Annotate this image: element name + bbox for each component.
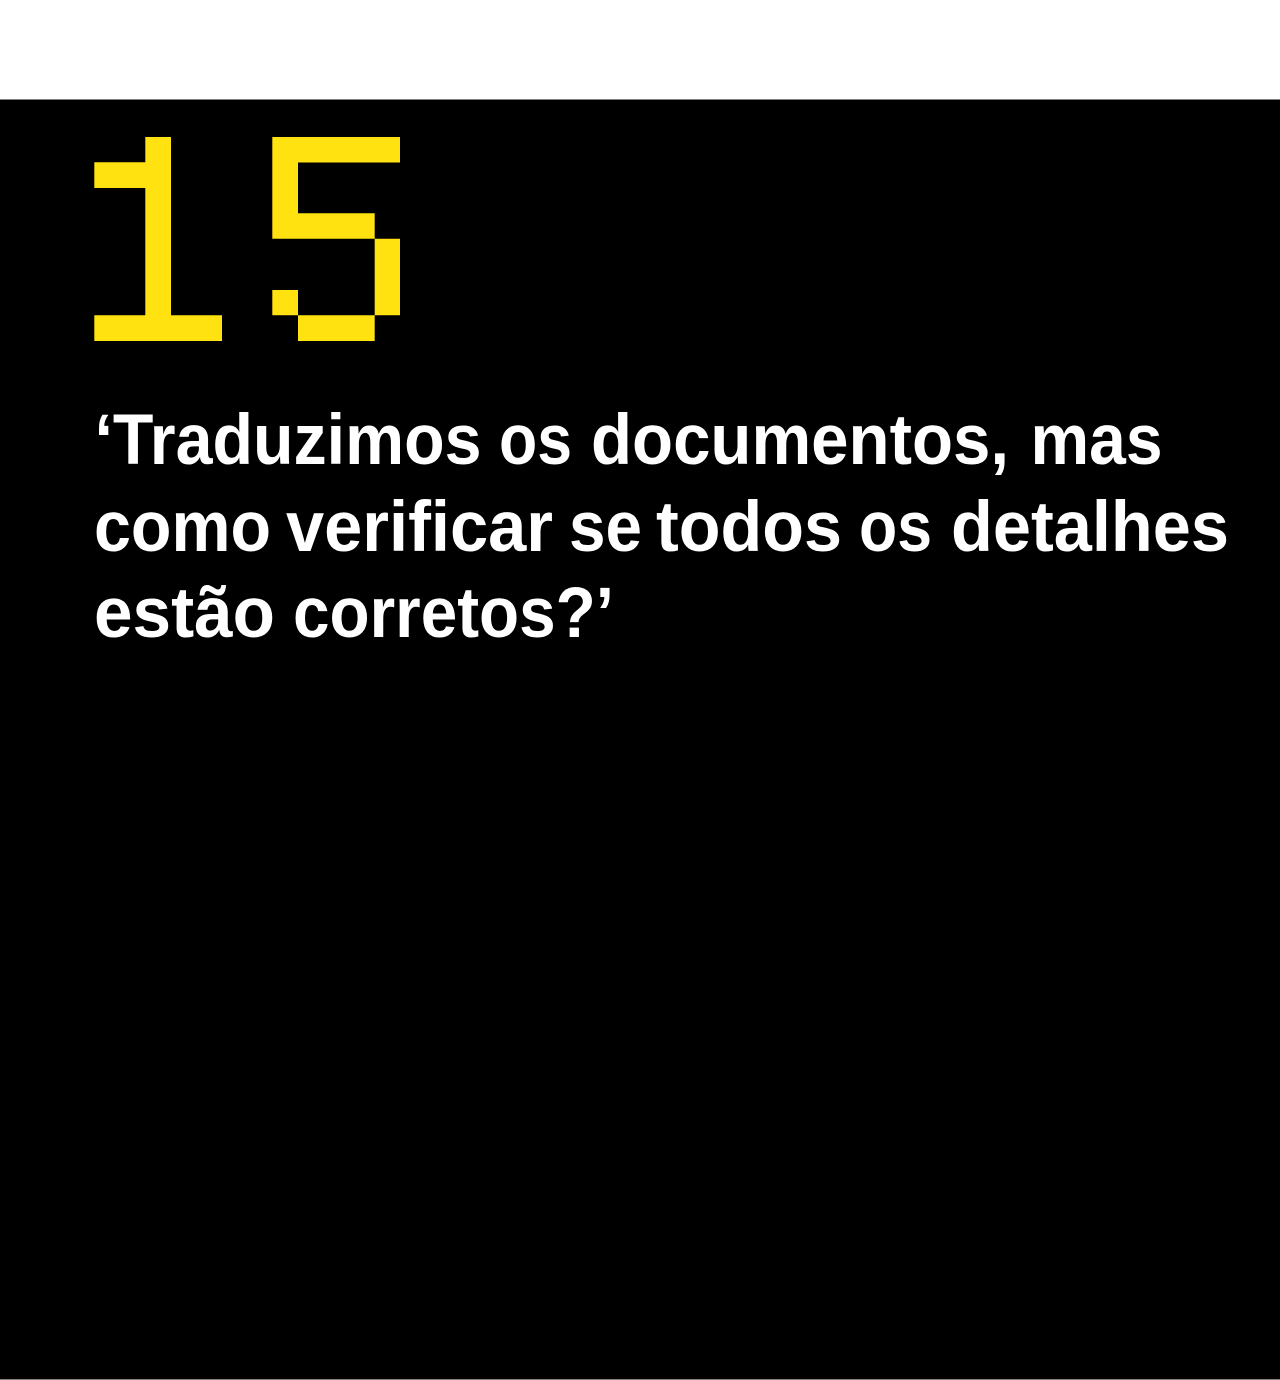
quote text: os: [499, 401, 572, 480]
number 15 in pixel style: [94, 137, 400, 341]
quote text: ‘Traduzimos: [94, 401, 482, 480]
quote text: se: [569, 488, 642, 567]
quote text: estão: [94, 574, 275, 653]
quote text: verificar: [286, 488, 553, 567]
quote text: mas: [1030, 401, 1162, 480]
quote text: [94, 401, 1229, 653]
quote text: como: [94, 488, 271, 567]
quote text: corretos?’: [293, 574, 614, 653]
quote text: os: [859, 488, 932, 567]
quote text: documentos,: [591, 401, 1009, 480]
digit 5: [272, 137, 400, 341]
quote text: detalhes: [951, 488, 1229, 567]
digit 1: [94, 137, 222, 341]
quote text: todos: [656, 488, 842, 567]
